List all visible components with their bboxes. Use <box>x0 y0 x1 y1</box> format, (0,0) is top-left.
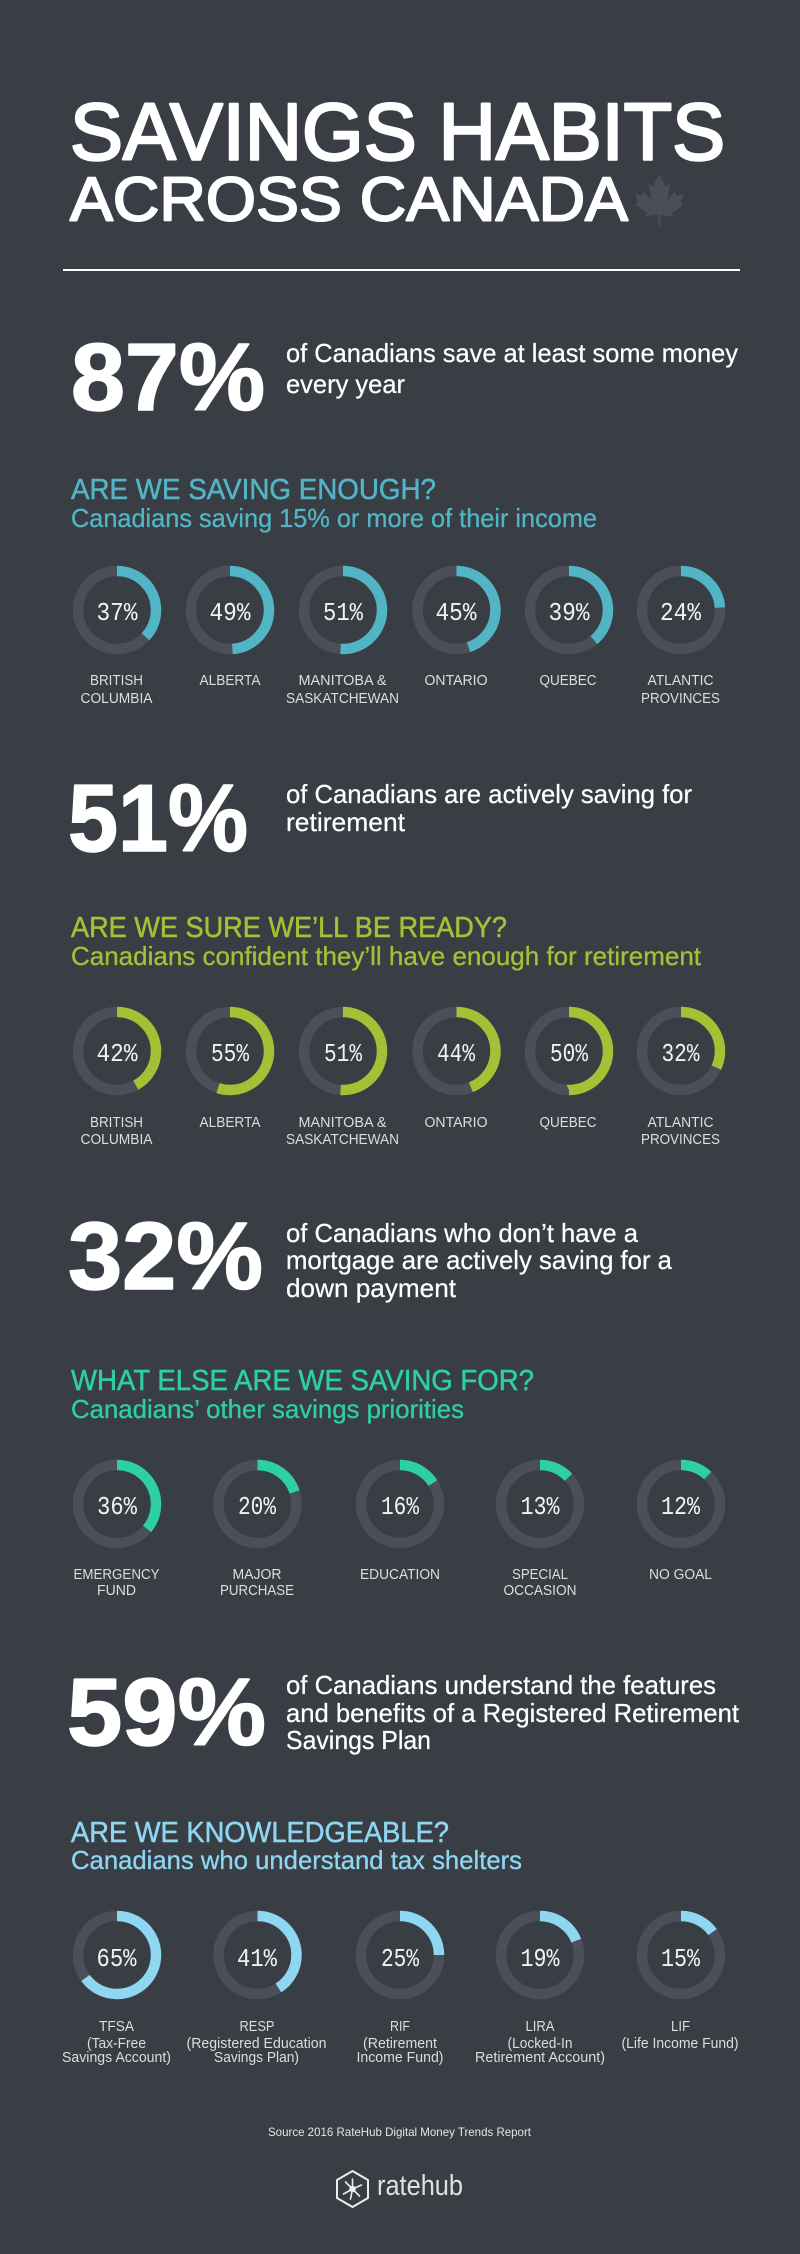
donut: Major Purchase 20%: 20% <box>238 1492 276 1522</box>
panel: are we knowledgeable <box>62 1817 738 2066</box>
icon: hexagon asterisk <box>337 2171 368 2207</box>
stat text: of Canadians who don’t have a <box>286 1218 639 1248</box>
donut: British Columbia 42%: 42% <box>96 1039 138 1069</box>
donut: No Goal 12%: 12% <box>661 1492 700 1522</box>
donut: Atlantic Provinces 32% <box>641 1012 720 1148</box>
donut: British Columbia 37%: COLUMBIA <box>80 691 153 707</box>
donut: Ontario 45%: ONTARIO <box>424 673 488 689</box>
donut: Atlantic Provinces 24% <box>641 571 720 707</box>
stat text <box>286 779 692 837</box>
stat number: 51% <box>68 765 248 872</box>
donut: Quebec 39%: QUEBEC <box>540 673 596 689</box>
donut: Quebec 39%: 39% <box>548 598 590 628</box>
donut: TFSA 65%: Savings Account) <box>62 2050 171 2066</box>
donut: Alberta 49%: 49% <box>210 598 251 628</box>
donut: Major Purchase 20% <box>218 1465 296 1599</box>
donut: Atlantic Provinces 24%: PROVINCES <box>641 691 720 707</box>
donut: No Goal 12%: NO GOAL <box>649 1567 712 1583</box>
title <box>70 88 725 234</box>
donut: Manitoba and Saskatchewan 51%: SASKATCHEWAN <box>286 691 399 707</box>
donut: Manitoba and Saskatchewan 51%: SASKATCHEWAN <box>286 1132 399 1148</box>
donut: LIF 15%: LIF <box>671 2019 690 2035</box>
donut: Alberta 49%: ALBERTA <box>200 673 261 689</box>
stat text <box>286 1218 673 1303</box>
heading: ARE WE KNOWLEDGEABLE? <box>71 1817 449 1849</box>
subheading: Canadians who understand tax shelters <box>71 1845 522 1875</box>
donut: Alberta 55% <box>191 1012 269 1131</box>
stat number: 59% <box>67 1659 266 1766</box>
donut: Education 16% <box>360 1465 440 1583</box>
stat number: 32% <box>68 1203 263 1310</box>
stat: 59% <box>67 1659 740 1766</box>
heading: WHAT ELSE ARE WE SAVING FOR? <box>71 1365 534 1397</box>
donut: Special Occasion 13%: OCCASION <box>504 1583 576 1599</box>
donut: LIRA 19%: Retirement Account) <box>475 2050 605 2066</box>
donut: British Columbia 37%: BRITISH <box>90 673 143 689</box>
stat text: mortgage are actively saving for a <box>286 1245 673 1275</box>
stat: 51% <box>68 765 692 872</box>
donut: Atlantic Provinces 24%: ATLANTIC <box>648 673 714 689</box>
stat text: of Canadians save at least some money <box>286 338 738 368</box>
donut: Education 16%: EDUCATION <box>360 1567 440 1583</box>
donut: Quebec 50% <box>530 1012 608 1131</box>
donut: RIF 25%: Income Fund) <box>356 2050 444 2066</box>
donut: Quebec 50%: QUEBEC <box>540 1115 596 1131</box>
stat text <box>286 338 738 399</box>
panel: what else are we saving for <box>71 1365 720 1599</box>
title: SAVINGS HABITS <box>70 88 725 178</box>
donut: TFSA 65%: (Tax-Free <box>87 2036 146 2052</box>
logo wordmark: ratehub <box>377 2170 463 2202</box>
donut: Atlantic Provinces 24%: 24% <box>660 598 701 628</box>
donut: LIF 15%: 15% <box>661 1944 700 1974</box>
donut: Ontario 45% <box>418 571 496 689</box>
donut: Atlantic Provinces 32%: PROVINCES <box>641 1132 720 1148</box>
stat text: of Canadians understand the features <box>286 1670 716 1700</box>
subheading: Canadians saving 15% or more of their income <box>71 503 597 533</box>
stat number: 87% <box>71 324 265 431</box>
title: ACROSS CANADA <box>70 166 629 234</box>
donut: RESP 41% <box>186 1916 326 2066</box>
donut: Alberta 55%: ALBERTA <box>200 1115 261 1131</box>
donut: British Columbia 42%: BRITISH <box>90 1115 143 1131</box>
stat: 32% <box>68 1203 673 1310</box>
donut: Atlantic Provinces 32%: 32% <box>662 1039 700 1069</box>
donut: TFSA 65% <box>62 1916 171 2066</box>
panel: are we sure we'll be ready <box>71 912 720 1148</box>
donut: LIRA 19% <box>475 1916 605 2066</box>
donut: Quebec 39% <box>530 571 608 689</box>
donut: Special Occasion 13%: 13% <box>520 1492 560 1522</box>
stat text: of Canadians are actively saving for <box>286 779 692 809</box>
donut: Emergency Fund 36%: EMERGENCY <box>74 1567 160 1583</box>
subheading: Canadians confident they’ll have enough for retirement <box>71 941 702 971</box>
source note: Source 2016 RateHub Digital Money Trends Report <box>268 2125 532 2139</box>
donut: RIF 25%: RIF <box>390 2019 410 2035</box>
donut: RIF 25%: 25% <box>381 1944 419 1974</box>
logo: ratehub <box>337 2170 463 2207</box>
heading: ARE WE SURE WE’LL BE READY? <box>71 912 507 944</box>
donut: Ontario 44%: 44% <box>437 1039 475 1069</box>
donut: LIRA 19%: LIRA <box>526 2019 555 2035</box>
donut: Manitoba and Saskatchewan 51% <box>286 1012 399 1148</box>
donut: RIF 25%: (Retirement <box>363 2036 437 2052</box>
donut: Manitoba and Saskatchewan 51%: 51% <box>324 1039 362 1069</box>
donut: LIRA 19%: 19% <box>520 1944 560 1974</box>
donut: Manitoba and Saskatchewan 51% <box>286 571 399 707</box>
stat text: every year <box>286 369 405 399</box>
donut: Emergency Fund 36%: 36% <box>97 1492 137 1522</box>
donut: LIF 15% <box>622 1916 738 2052</box>
donut: Special Occasion 13% <box>501 1465 579 1599</box>
donut: Major Purchase 20%: MAJOR <box>232 1567 282 1583</box>
donut: Manitoba and Saskatchewan 51%: MANITOBA & <box>298 1115 387 1131</box>
donut: LIF 15%: (Life Income Fund) <box>622 2036 738 2052</box>
donut: Alberta 55%: 55% <box>211 1039 249 1069</box>
donut: Atlantic Provinces 32%: ATLANTIC <box>648 1115 714 1131</box>
donut: Emergency Fund 36% <box>74 1465 160 1599</box>
donut: Manitoba and Saskatchewan 51%: MANITOBA & <box>298 673 387 689</box>
donut: British Columbia 37% <box>78 571 156 707</box>
donut: Alberta 49% <box>191 571 269 689</box>
donut: RESP 41%: (Registered Education <box>186 2036 326 2052</box>
donut: Education 16%: 16% <box>381 1492 419 1522</box>
stat: 87% <box>71 324 738 431</box>
stat text: down payment <box>286 1273 457 1303</box>
heading: ARE WE SAVING ENOUGH? <box>71 474 436 506</box>
stat text: Savings Plan <box>286 1725 431 1755</box>
donut: No Goal 12% <box>642 1465 720 1583</box>
donut: Ontario 44% <box>418 1012 496 1131</box>
donut: LIRA 19%: (Locked-In <box>508 2036 572 2052</box>
donut: TFSA 65%: TFSA <box>99 2019 134 2035</box>
subheading: Canadians’ other savings priorities <box>71 1394 464 1424</box>
donut: Ontario 45%: 45% <box>436 598 477 628</box>
donut: Quebec 50%: 50% <box>550 1039 588 1069</box>
donut: Major Purchase 20%: PURCHASE <box>220 1583 294 1599</box>
donut: Special Occasion 13%: SPECIAL <box>512 1567 568 1583</box>
stat text <box>286 1670 740 1755</box>
stat text: and benefits of a Registered Retirement <box>286 1698 740 1728</box>
donut: British Columbia 42% <box>78 1012 156 1148</box>
icon: maple leaf <box>635 175 683 227</box>
donut: Emergency Fund 36%: FUND <box>97 1583 136 1599</box>
donut: RESP 41%: Savings Plan) <box>214 2050 299 2066</box>
donut: RESP 41%: RESP <box>240 2019 274 2035</box>
donut: RESP 41%: 41% <box>237 1944 277 1974</box>
donut: Manitoba and Saskatchewan 51%: 51% <box>323 598 363 628</box>
donut: TFSA 65%: 65% <box>96 1944 137 1974</box>
donut: RIF 25% <box>356 1916 444 2066</box>
stat text: retirement <box>286 807 406 837</box>
panel: are we saving enough <box>71 474 720 707</box>
donut: British Columbia 37%: 37% <box>96 598 138 628</box>
donut: British Columbia 42%: COLUMBIA <box>80 1132 153 1148</box>
donut: Ontario 44%: ONTARIO <box>424 1115 488 1131</box>
